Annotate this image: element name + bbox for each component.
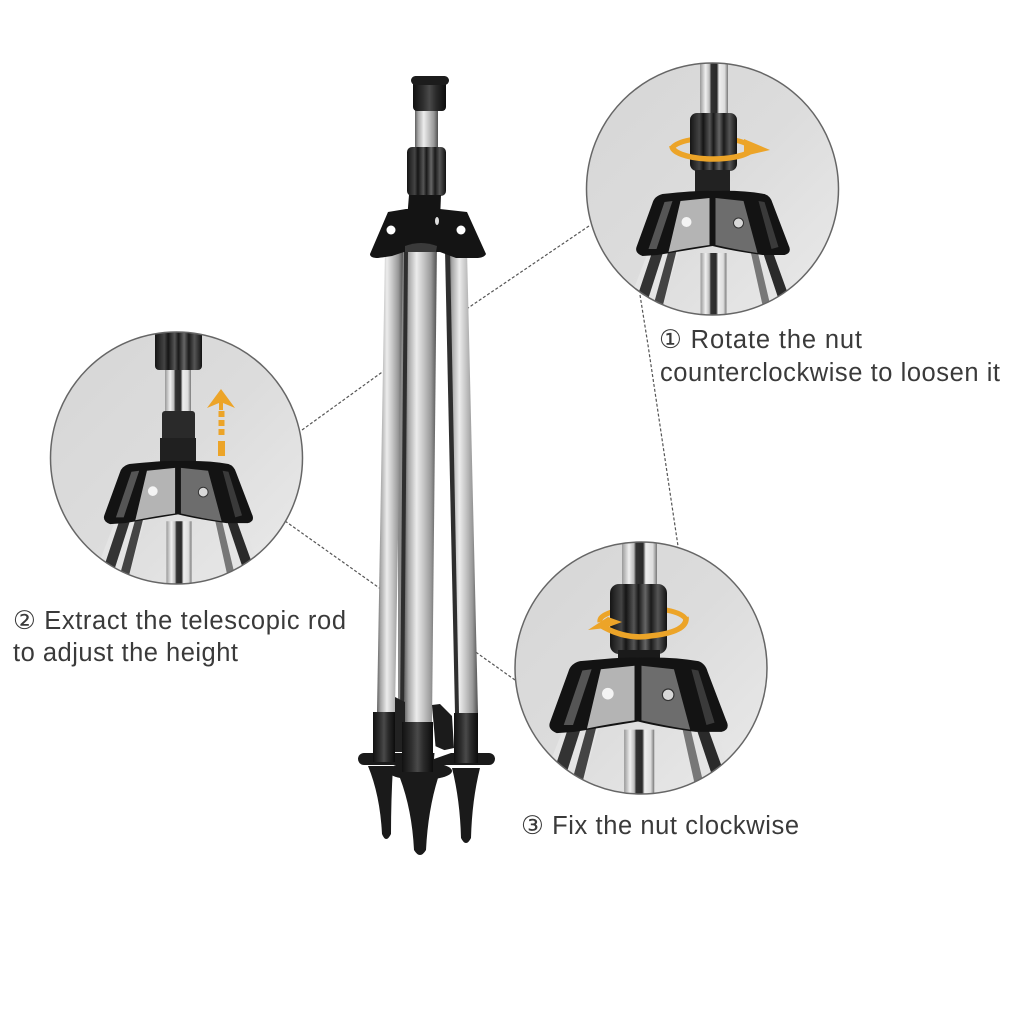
rotation arrow front: [588, 617, 686, 637]
back of rotation arrow: [672, 138, 752, 148]
caption: step 1: ① Rotate the nut: [659, 326, 862, 354]
rod: [622, 542, 657, 584]
top bracket: [370, 209, 486, 258]
threaded collar: [695, 170, 730, 192]
rotation arrow front: [672, 139, 770, 159]
tripod rods: [377, 240, 478, 722]
nut: [610, 584, 667, 654]
main tripod sprinkler stand: [358, 76, 495, 855]
caption: step 1: counterclockwise to loosen it: [660, 359, 1000, 387]
top cap: [411, 76, 449, 148]
dashed connector lines: [285, 226, 678, 680]
detail circle 2: extract rod: [50, 325, 302, 599]
caption: step 2: ② Extract the telescopic rod: [13, 607, 346, 635]
detail circle 1: rotate nut: [586, 55, 838, 333]
detail circle 3: fix nut: [515, 540, 767, 822]
back of rotation arrow: [600, 608, 686, 622]
extended rod: [165, 370, 191, 415]
bracket: [549, 658, 728, 794]
bracket: [104, 461, 253, 584]
upper nut: [155, 332, 202, 370]
adjustment nut and collar: [405, 147, 446, 245]
ground spikes: [358, 697, 495, 855]
up arrow: [207, 389, 235, 456]
bracket: [636, 190, 790, 314]
caption: step 2: to adjust the height: [13, 639, 238, 667]
caption: step 1: [659, 326, 1000, 387]
caption: step 3: ③ Fix the nut clockwise: [521, 812, 799, 840]
rod: [700, 64, 728, 113]
nut: [690, 113, 737, 171]
collar: [162, 411, 195, 441]
caption: step 2: [13, 607, 346, 667]
